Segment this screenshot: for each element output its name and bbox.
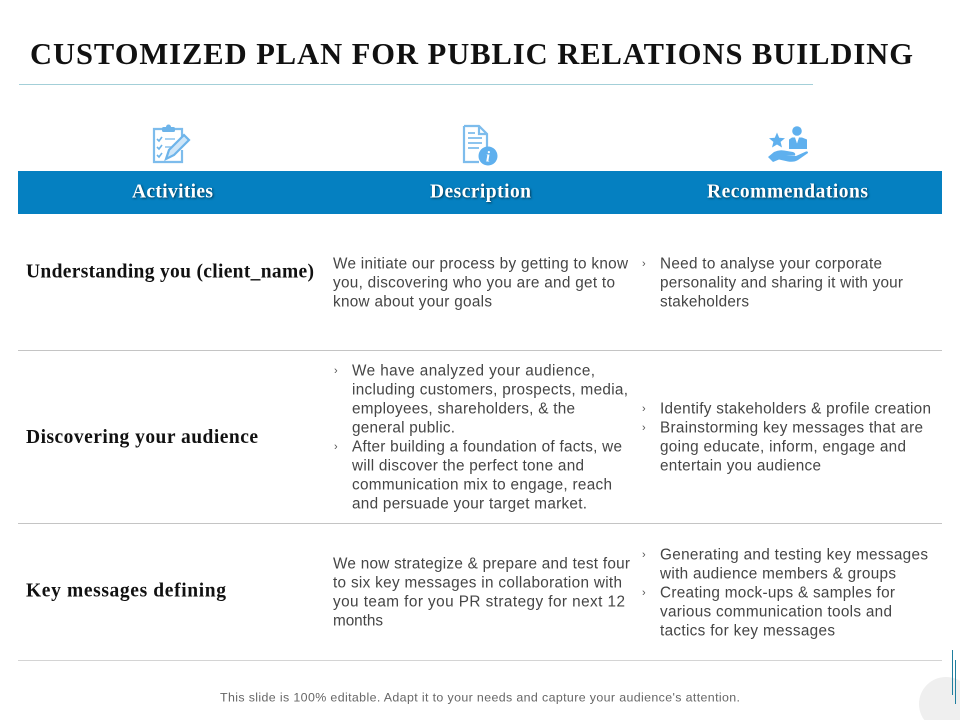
icon: document with info badge: i: [486, 150, 491, 166]
row 2 recommendations: Identify stakeholders & profile creation: [660, 400, 931, 418]
row 2 description: We have analyzed your audience,: [352, 362, 595, 380]
icon: document with info badge: [464, 126, 498, 166]
row 1 recommendations: ›: [642, 258, 646, 270]
footer note: This slide is 100% editable. Adapt it to your needs and capture your audience's attention.: [220, 690, 740, 704]
row 2 description: ›: [334, 365, 338, 377]
row 1 recommendations: stakeholders: [660, 294, 749, 310]
row 3 description: [333, 556, 630, 630]
corner decoration: [919, 650, 960, 720]
row 1 description: you, discovering who you are and get to: [333, 274, 615, 292]
row 3 recommendations: ›: [642, 587, 646, 599]
title: CUSTOMIZED PLAN FOR PUBLIC RELATIONS BUILDING: [30, 37, 913, 71]
row 1 description: We initiate our process by getting to know: [333, 256, 629, 272]
header: Activities: Activities: [132, 182, 213, 202]
row 2 description: including customers, prospects, media,: [352, 382, 628, 398]
row 1 label: Understanding you (client_name): [26, 262, 314, 282]
title underline: [19, 84, 813, 85]
row 2 recommendations: ›: [642, 403, 646, 415]
row 3 recommendations: Creating mock-ups & samples for: [660, 584, 895, 602]
row 2 description: and persuade your target market.: [352, 496, 587, 512]
icon: hand holding star and person: [768, 126, 808, 162]
row 3 description: to six key messages in collaboration with: [333, 574, 622, 592]
row 1 recommendations: [642, 256, 903, 310]
icon: checklist with pencil: [154, 124, 189, 162]
row 2 description: general public.: [352, 420, 455, 436]
row 3 recommendations: tactics for key messages: [660, 622, 835, 640]
row 2 description: communication mix to engage, reach: [352, 476, 612, 494]
row 2 recommendations: Brainstorming key messages that are: [660, 420, 923, 436]
header: Description: Description: [430, 182, 531, 202]
row 3 recommendations: ›: [642, 549, 646, 561]
row 2 recommendations: entertain you audience: [660, 458, 821, 474]
row 2 label: Discovering your audience: [26, 427, 258, 448]
row 3 recommendations: [642, 546, 928, 640]
row 2 description: will discover the perfect tone and: [351, 458, 584, 474]
row 3 recommendations: Generating and testing key messages: [660, 546, 928, 564]
row 1 recommendations: personality and sharing it with your: [660, 274, 903, 292]
row 3 description: months: [333, 612, 383, 630]
row 3 recommendations: with audience members & groups: [659, 566, 896, 582]
row 3 description: you team for you PR strategy for next 12: [333, 594, 625, 610]
row 3 description: We now strategize & prepare and test four: [333, 556, 630, 572]
row 1 description: know about your goals: [333, 294, 492, 310]
header: Recommendations: Recommendations: [707, 182, 868, 202]
row 2 description: ›: [334, 441, 338, 453]
row 2 description: [334, 362, 628, 512]
row 2 recommendations: [642, 400, 931, 474]
row 3 recommendations: various communication tools and: [660, 604, 892, 620]
row 2 description: employees, shareholders, & the: [352, 400, 575, 418]
header bar: [18, 171, 942, 214]
row 3 label: Key messages defining: [26, 580, 226, 602]
row 2 recommendations: ›: [642, 422, 646, 434]
row 1 recommendations: Need to analyse your corporate: [660, 256, 882, 272]
row 1 description: [333, 256, 629, 310]
row 2 description: After building a foundation of facts, we: [352, 438, 622, 456]
row 2 recommendations: going educate, inform, engage and: [660, 438, 906, 456]
